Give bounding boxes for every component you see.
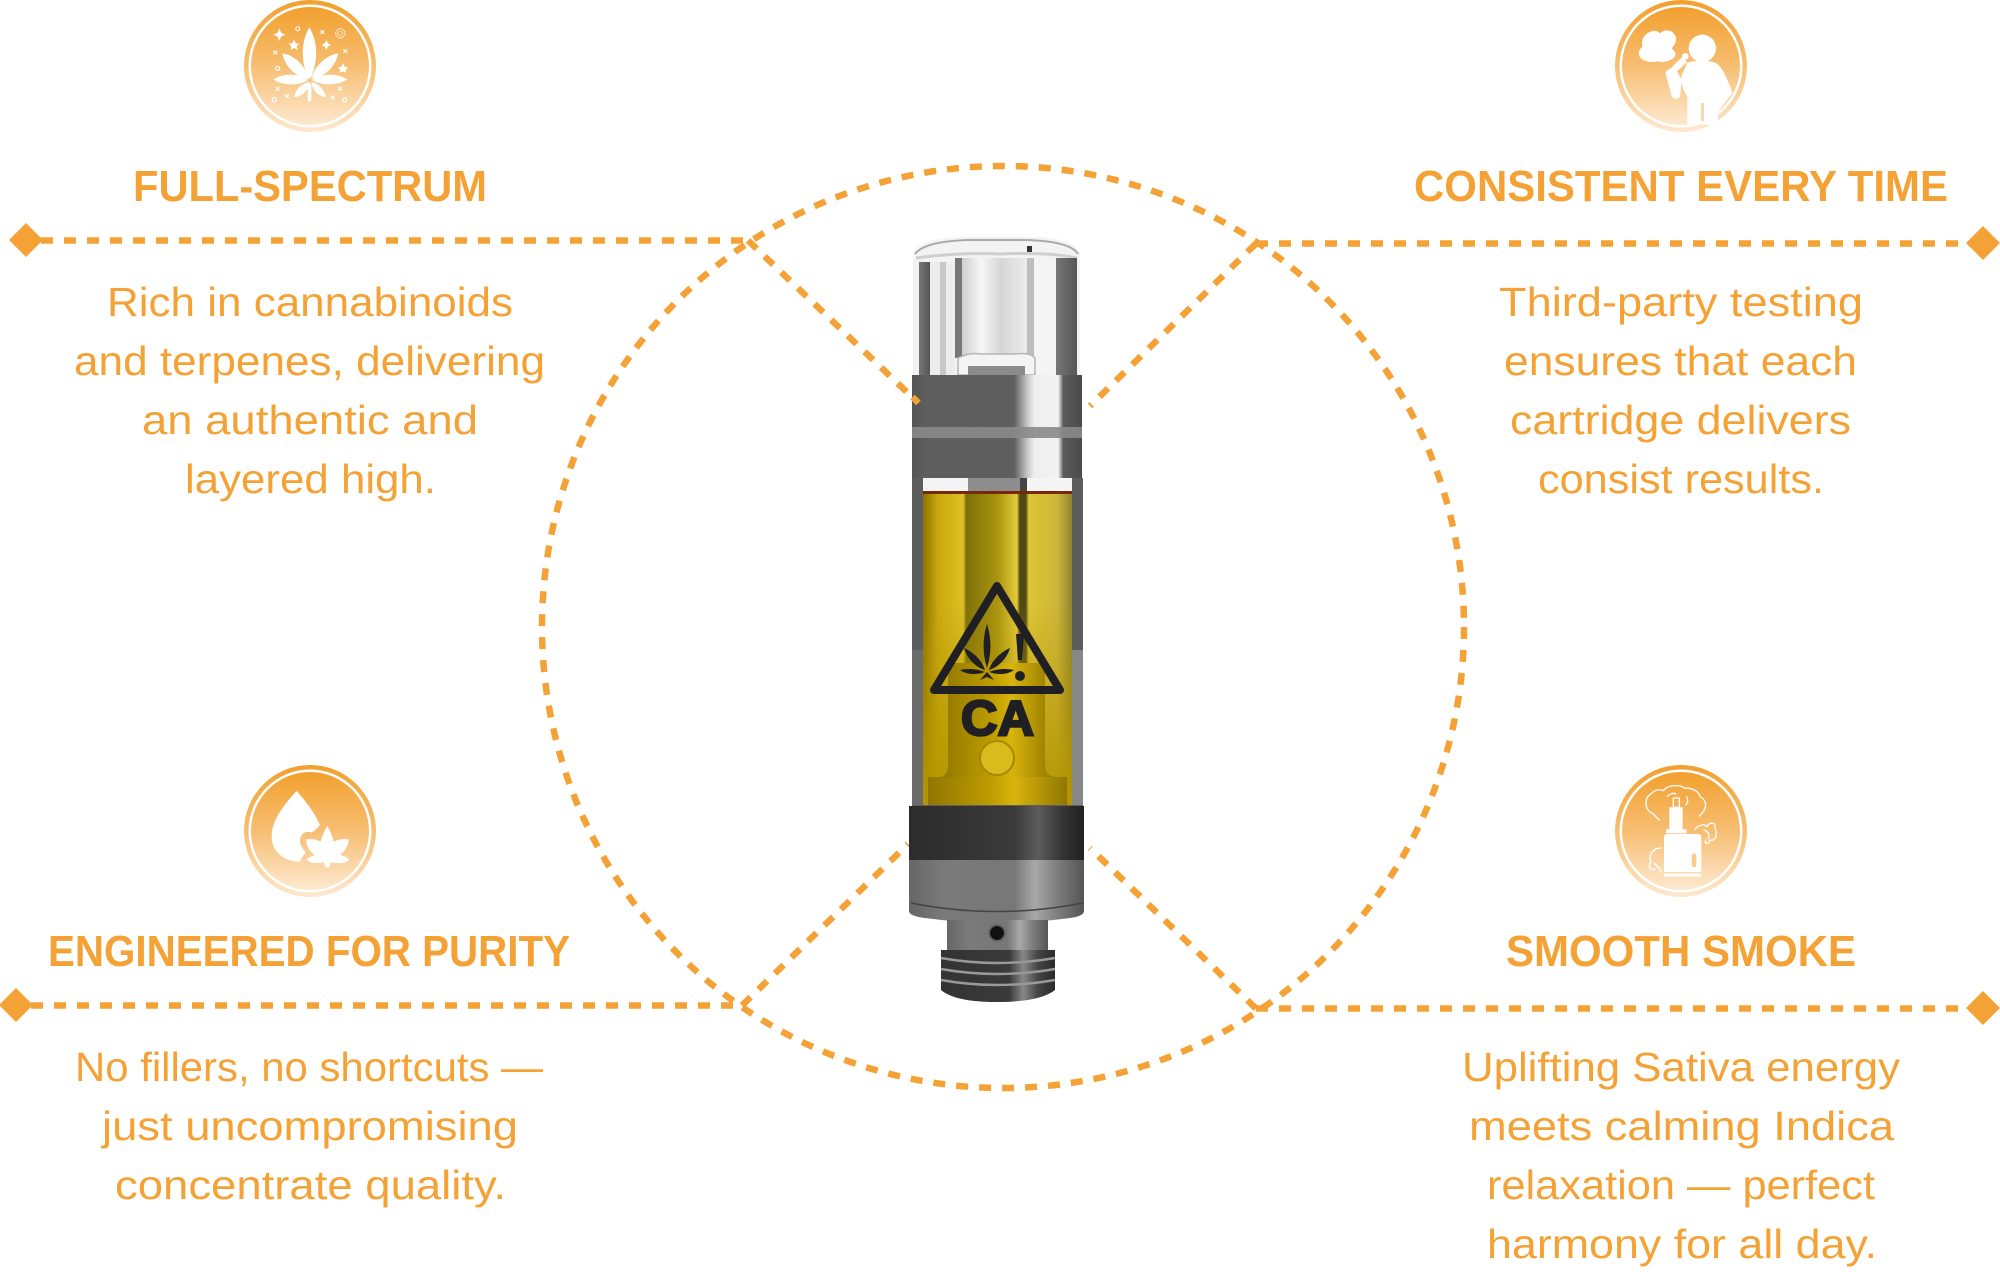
end of top-left connector drawn over collar bbox=[912, 397, 918, 403]
body text bbox=[1499, 279, 1863, 502]
body text bbox=[1462, 1044, 1901, 1267]
dashed central circle bbox=[542, 166, 1464, 1088]
body text: ensures that each bbox=[1504, 338, 1857, 384]
body text: layered high. bbox=[185, 456, 436, 502]
warning symbol with CA mark bbox=[934, 586, 1060, 746]
panel: engineered for purity bbox=[48, 765, 570, 1208]
heading: CONSISTENT EVERY TIME bbox=[1414, 162, 1948, 211]
body text: meets calming Indica bbox=[1469, 1103, 1894, 1149]
connector: bottom-left line bbox=[0, 844, 908, 1022]
body text bbox=[75, 1044, 543, 1208]
panel: consistent every time bbox=[1414, 0, 1948, 502]
icon: vape device with smoke bbox=[1615, 765, 1747, 897]
lower dark band and base bbox=[909, 806, 1084, 923]
body text: concentrate quality. bbox=[115, 1162, 506, 1208]
icon: cannabis leaf with sparkles bbox=[244, 0, 376, 132]
metal collar bbox=[912, 375, 1082, 478]
threaded connector bbox=[941, 920, 1055, 1002]
heading: FULL-SPECTRUM bbox=[133, 162, 487, 211]
body text: Uplifting Sativa energy bbox=[1462, 1044, 1901, 1090]
glass tank with oil bbox=[912, 478, 1083, 808]
warning symbol with CA mark: CA bbox=[961, 692, 1034, 746]
icon: oil drop with leaf bbox=[244, 765, 376, 897]
body text: an authentic and bbox=[142, 397, 478, 443]
body text: consist results. bbox=[1538, 456, 1824, 502]
body text: Rich in cannabinoids bbox=[107, 279, 513, 325]
icon: person vaping with cloud bbox=[1615, 0, 1747, 132]
body text: No fillers, no shortcuts — bbox=[75, 1044, 543, 1090]
panel: smooth smoke bbox=[1462, 765, 1901, 1267]
heading: SMOOTH SMOKE bbox=[1506, 927, 1856, 976]
body text: Third-party testing bbox=[1499, 279, 1863, 325]
cartridge product illustration bbox=[909, 237, 1084, 1002]
body text: and terpenes, delivering bbox=[74, 338, 545, 384]
body text: relaxation — perfect bbox=[1487, 1162, 1876, 1208]
panel: full-spectrum bbox=[74, 0, 545, 502]
heading: ENGINEERED FOR PURITY bbox=[48, 927, 570, 976]
connector: bottom-right line bbox=[1090, 848, 2000, 1025]
connector: top-right line bbox=[1090, 226, 2000, 406]
body text: just uncompromising bbox=[101, 1103, 518, 1149]
body text: cartridge delivers bbox=[1510, 397, 1851, 443]
connector: top-left line bbox=[9, 223, 912, 397]
body text bbox=[74, 279, 545, 502]
glass cap bbox=[913, 237, 1080, 377]
body text: harmony for all day. bbox=[1487, 1221, 1877, 1267]
